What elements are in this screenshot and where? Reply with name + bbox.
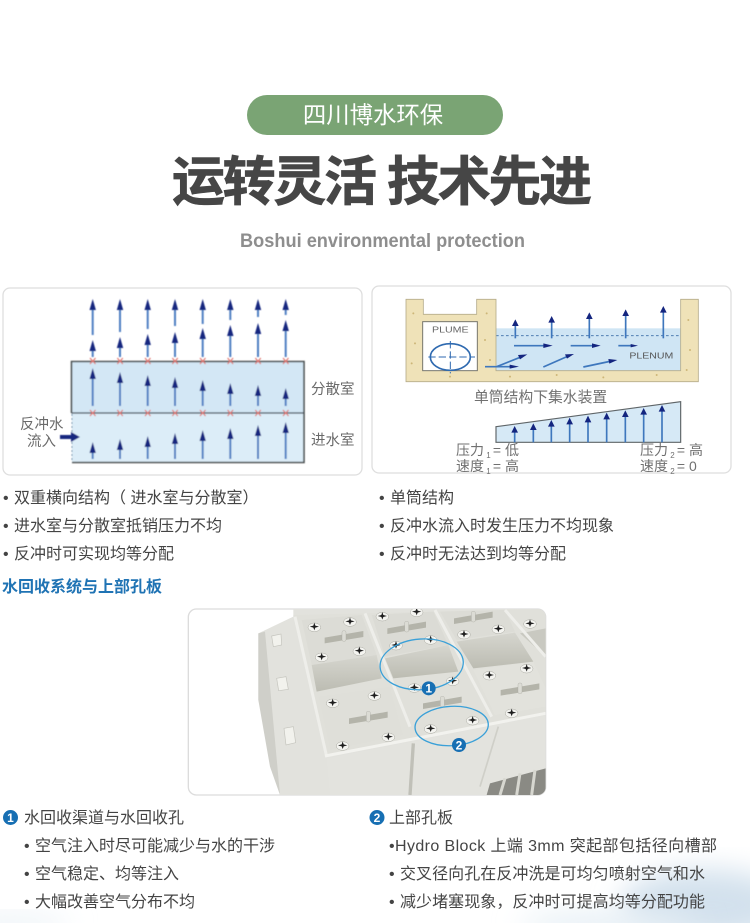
diagram labels: = 低	[493, 442, 519, 458]
diagram labels: 2	[668, 467, 677, 476]
left comparison bullets: 双重横向结构（ 进水室与分散室）	[14, 489, 258, 507]
left feature list: •	[24, 894, 30, 911]
brand pill	[247, 95, 503, 135]
diagram labels: = 高	[677, 442, 703, 458]
subtitle: Boshui environmental protection	[240, 231, 525, 252]
left feature list: •	[24, 838, 30, 855]
callout 1	[378, 636, 465, 696]
right feature list: •	[389, 866, 395, 883]
ribs	[295, 610, 546, 757]
cell floors	[302, 615, 377, 665]
badge 1	[3, 810, 18, 825]
right feature list: 交叉径向孔在反冲洗是可均匀喷射空气和水	[400, 865, 705, 883]
holes	[308, 623, 321, 632]
pipe	[430, 344, 470, 370]
chambers	[72, 362, 304, 462]
right comparison bullets: 反冲水流入时发生压力不均现象	[390, 517, 614, 535]
diagram labels: 单筒结构下集水装置	[474, 389, 607, 406]
plenum arrows	[485, 312, 663, 367]
diagram labels: = 0	[677, 458, 697, 474]
right feature list: 上部孔板	[389, 809, 453, 827]
right comparison bullets: •	[379, 546, 385, 563]
left feature list: 空气稳定、均等注入	[35, 865, 179, 883]
left feature list: 水回收渠道与水回收孔	[24, 809, 184, 827]
right comparison bullets: •	[379, 518, 385, 535]
diagram labels: 反冲水	[20, 416, 64, 433]
left comparison bullets: •	[3, 490, 9, 507]
vent grille	[487, 768, 546, 795]
diagram labels: 分散室	[311, 381, 354, 398]
diagram labels	[20, 381, 354, 450]
left comparison bullets: 进水室与分散室抵销压力不均	[14, 517, 222, 535]
panel: product photo	[188, 608, 546, 795]
side tabs	[272, 634, 296, 745]
inlet arrow	[60, 432, 80, 442]
right comparison bullets: 单筒结构	[390, 489, 454, 507]
diagram labels: 速度	[456, 458, 484, 474]
pressure wedge	[496, 402, 681, 442]
badge 1: 1	[7, 811, 14, 825]
badge 2	[370, 810, 384, 825]
badge 2: 2	[374, 811, 381, 825]
left feature list	[3, 809, 275, 911]
diagram labels: 1	[484, 451, 493, 460]
right feature list: 减少堵塞现象，反冲时可提高均等分配功能	[400, 893, 705, 911]
right feature list: •Hydro Block 上端 3mm 突起部包括径向槽部	[389, 837, 717, 855]
callout 2	[414, 704, 489, 752]
left comparison bullets: 反冲时可实现均等分配	[14, 545, 174, 563]
title: 运转灵活 技术先进	[172, 153, 592, 212]
left feature list: 大幅改善空气分布不均	[35, 893, 195, 911]
right feature list: •	[389, 894, 395, 911]
right comparison bullets: 反冲时无法达到均等分配	[390, 545, 566, 563]
panel: single-tube diagram: PLUME	[432, 325, 469, 335]
left feature list: •	[24, 866, 30, 883]
slots	[325, 631, 363, 643]
diagram labels: 压力	[456, 442, 484, 458]
diagram labels	[456, 389, 703, 476]
diagram labels: = 高	[493, 458, 519, 474]
block body	[258, 609, 546, 795]
right comparison bullets: •	[379, 490, 385, 507]
background clouds	[0, 869, 750, 923]
diagram labels: 进水室	[311, 432, 354, 449]
section heading: 水回收系统与上部孔板	[2, 577, 162, 596]
callout 1: 1	[425, 682, 432, 696]
left comparison bullets	[3, 489, 258, 563]
recessed pits	[312, 655, 382, 692]
panel: single-tube diagram	[372, 286, 731, 476]
diagram labels: 1	[484, 467, 493, 476]
red orifice marks	[90, 358, 288, 416]
brand pill: 四川博水环保	[303, 102, 443, 128]
flow arrows	[90, 299, 289, 459]
diagram labels: 流入	[27, 433, 56, 450]
panel: dual-chamber diagram	[3, 288, 362, 475]
left feature list: 空气注入时尽可能减少与水的干涉	[35, 837, 275, 855]
right comparison bullets	[379, 489, 614, 563]
panel: single-tube diagram: PLENUM	[629, 350, 673, 360]
diagram labels: 压力	[640, 442, 668, 458]
callout 2: 2	[456, 738, 463, 752]
diagram labels: 速度	[640, 458, 668, 474]
concrete wall	[406, 299, 698, 382]
right feature list	[370, 809, 717, 911]
left comparison bullets: •	[3, 546, 9, 563]
plenum water	[496, 328, 681, 371]
top face	[293, 609, 546, 757]
left comparison bullets: •	[3, 518, 9, 535]
diagram labels: 2	[668, 451, 677, 460]
